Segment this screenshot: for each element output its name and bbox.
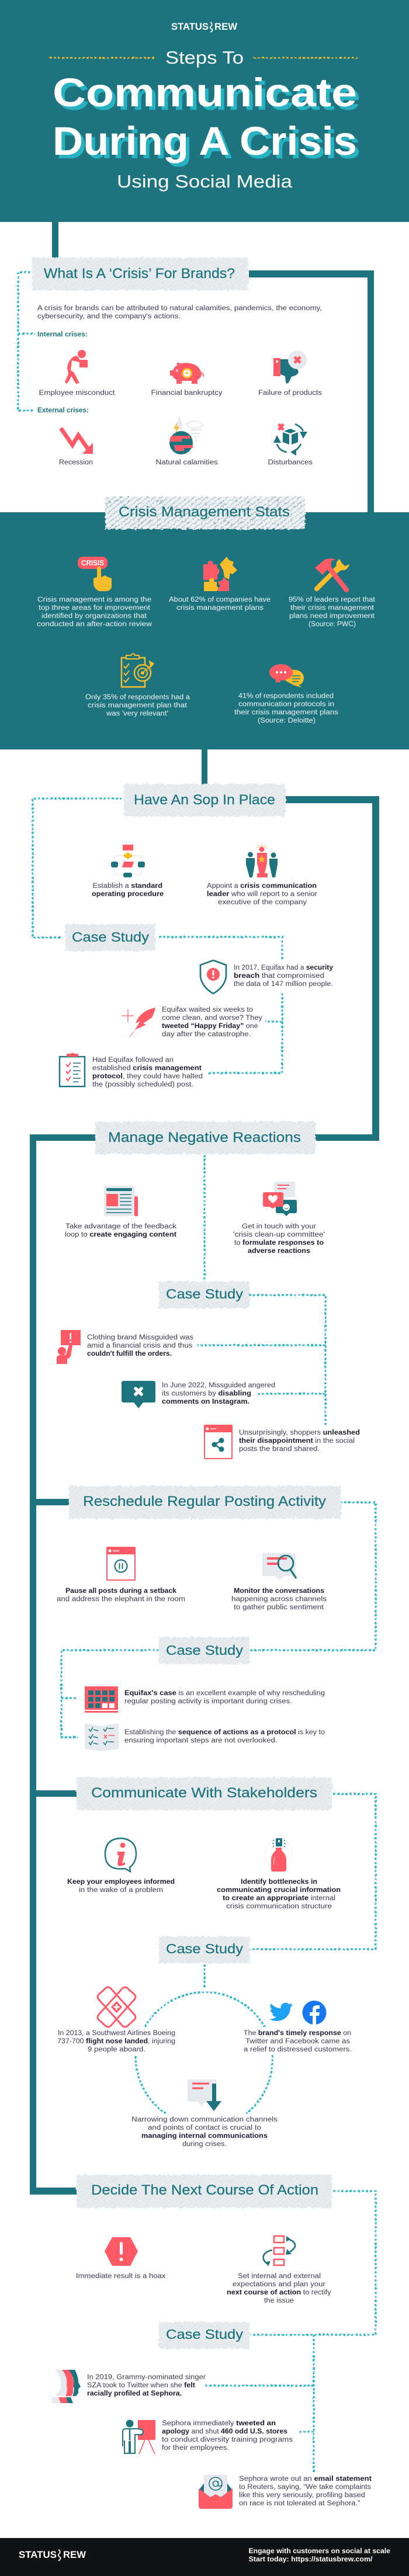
text: identify bottlenecks: Identify bottlenecks in bbox=[241, 1879, 317, 1886]
failure of products label: Failure of products bbox=[258, 390, 322, 397]
text: shoppers disappointment: their disappointment in the social bbox=[239, 1438, 355, 1445]
text: standard operating procedure: Establish a standard bbox=[92, 883, 162, 890]
connector: manage reactions bbox=[203, 1151, 206, 1279]
footer call to action: Engage with customers on social at scale bbox=[249, 2548, 390, 2555]
stat: 41 percent: communication protocols in bbox=[238, 701, 334, 708]
icon: warning hexagon bbox=[105, 2237, 138, 2266]
icon: reactions chat bbox=[263, 1182, 297, 1216]
natural calamities label: Natural calamities bbox=[155, 459, 218, 466]
internal crises label: Internal crises: bbox=[37, 331, 88, 338]
text: brand timely response: Twitter and Facebook came as bbox=[245, 2038, 350, 2045]
text: pause posts: Pause all posts during a setback bbox=[65, 1588, 177, 1595]
icon: quill bbox=[122, 1008, 155, 1039]
stat: 95 percent: (Source: PWC) bbox=[309, 621, 356, 628]
icon: process cycle bbox=[264, 2236, 295, 2266]
icon: newspaper bbox=[104, 1186, 138, 1216]
case study heading: Case Study bbox=[166, 1286, 244, 1301]
stat: top three areas: conducted an after-action review bbox=[37, 621, 152, 628]
text: set expectations: expectations and plan your bbox=[233, 2281, 325, 2288]
text: missguided crisis: amid a financial crisis and thus bbox=[87, 1342, 193, 1349]
financial bankruptcy label: Financial bankruptcy bbox=[151, 390, 223, 397]
text: email statement bbox=[239, 2476, 372, 2507]
text: keep employees informed: in the wake of a problem bbox=[79, 1887, 163, 1894]
panel: what is a crisis bbox=[32, 258, 322, 466]
text: sephora apology: for their employees. bbox=[162, 2445, 229, 2452]
text: brand timely response: The brand's timely response on bbox=[244, 2030, 351, 2037]
text: shoppers disappointment: Unsurprisingly, shoppers unleashed bbox=[239, 1429, 360, 1436]
case study heading bbox=[159, 1637, 249, 1664]
icon: face profiles bbox=[51, 2370, 81, 2403]
connector: sop case study bbox=[159, 937, 282, 1073]
text: equifax breach bbox=[234, 964, 334, 988]
icon: pause window bbox=[107, 1547, 135, 1580]
text: disabling comments bbox=[162, 1382, 275, 1405]
icon: presenter bbox=[123, 2419, 155, 2454]
text: disabling comments: In June 2022, Missguided angered bbox=[162, 1382, 275, 1389]
footer logo: STATUS bbox=[19, 2549, 57, 2560]
icon: disturbances bbox=[273, 422, 307, 456]
text: monitor conversations: to gather public sentiment bbox=[234, 1604, 324, 1611]
panel: header bbox=[53, 21, 357, 192]
text: equifax case: regular posting activity is important during crises. bbox=[124, 1698, 292, 1705]
heading: Crisis Management Stats bbox=[119, 504, 290, 520]
text: clean-up committee: Get in touch with your bbox=[242, 1223, 316, 1230]
text: standard operating procedure bbox=[92, 883, 164, 898]
stat: 62 percent: About 62% of companies have bbox=[169, 596, 271, 603]
text: crisis communication leader: leader who will report to a senior bbox=[207, 891, 317, 898]
stat: 35 percent: was 'very relevant' bbox=[106, 710, 168, 717]
case study heading bbox=[159, 2322, 249, 2349]
intro text: A crisis for brands can be attributed to natural calamities, pandemics, the economy, bbox=[37, 305, 322, 312]
solid flow line bbox=[30, 222, 379, 2195]
text: email statement: to Reuters, saying, “We take complaints bbox=[239, 2484, 371, 2491]
text: crisis communication leader: Appoint a crisis communication bbox=[207, 883, 317, 890]
text: crisis management protocol bbox=[92, 1057, 203, 1088]
intro text: cybersecurity, and the company's actions. bbox=[37, 313, 181, 320]
icon: bandages bbox=[96, 1986, 137, 2028]
text: set expectations: the issue bbox=[264, 2297, 294, 2304]
text: disabling comments: its customers by disabling bbox=[162, 1390, 251, 1397]
text: crisis management protocol: Had Equifax followed an bbox=[92, 1057, 174, 1064]
icon: bottleneck bbox=[265, 1838, 292, 1872]
text: missguided crisis bbox=[87, 1334, 193, 1358]
heading bbox=[124, 784, 286, 817]
recession label: Recession bbox=[59, 459, 93, 466]
text: happy friday bbox=[162, 1006, 262, 1038]
stat: top three areas: Crisis management is among the bbox=[37, 596, 151, 603]
stat: 41 percent: (Source: Deloitte) bbox=[258, 717, 316, 724]
text: set expectations: Set internal and external bbox=[238, 2273, 321, 2280]
text: crisis management protocol: established crisis management bbox=[92, 1065, 202, 1072]
logo: REW bbox=[214, 21, 238, 32]
icon: team leader bbox=[246, 843, 278, 877]
heading: Manage Negative Reactions bbox=[108, 1130, 301, 1145]
icon: chat bubbles bbox=[269, 664, 304, 688]
stat: 95 percent: plans need improvement bbox=[289, 613, 375, 620]
footer call to action bbox=[249, 2548, 390, 2563]
panel: communicate with stakeholders bbox=[57, 1777, 352, 2148]
text: identify bottlenecks: communicating crucial information bbox=[217, 1887, 341, 1894]
text: sza sephora: In 2019, Grammy-nominated singer bbox=[87, 2374, 206, 2381]
heading: Have An Sop In Place bbox=[134, 792, 275, 808]
text: email statement: on race is not tolerated at Sephora.” bbox=[239, 2500, 361, 2507]
icon: financial bankruptcy bbox=[170, 363, 203, 384]
stat: top three areas bbox=[37, 596, 152, 628]
icon: tools bbox=[315, 558, 349, 590]
stat: 95 percent: their crisis management bbox=[290, 605, 375, 612]
text: sephora apology: Sephora immediately tweeted an bbox=[162, 2420, 276, 2427]
icon: calendar bbox=[85, 1686, 118, 1713]
text: happy friday: day after the catastrophe. bbox=[162, 1031, 251, 1038]
case study heading: Case Study bbox=[72, 929, 150, 945]
heading: What Is A ‘Crisis’ For Brands? bbox=[44, 266, 235, 282]
stat: top three areas: identified by organizations that bbox=[41, 613, 147, 620]
connector: decide case study bbox=[204, 2335, 314, 2472]
intro text bbox=[37, 305, 322, 320]
employee misconduct label: Employee misconduct bbox=[39, 390, 115, 397]
icon: employee misconduct bbox=[65, 350, 88, 384]
icon: flowchart bbox=[111, 845, 145, 877]
text: narrowing channels: managing internal communications bbox=[141, 2133, 268, 2140]
icon: clipboard target bbox=[122, 654, 154, 687]
icon: protester bbox=[57, 1330, 81, 1364]
text: pause posts: and address the elephant in the room bbox=[57, 1596, 185, 1603]
text: clean-up committee: to formulate responses to bbox=[234, 1240, 324, 1247]
connector: reschedule bbox=[250, 1502, 376, 1650]
text: brand timely response bbox=[244, 2030, 352, 2053]
stat: top three areas: top three areas for improvement bbox=[39, 605, 151, 612]
icon: share window bbox=[204, 1425, 232, 1459]
icon: checklist bbox=[60, 1053, 85, 1086]
text: feedback loop: Take advantage of the feedback bbox=[65, 1223, 176, 1230]
case study heading bbox=[65, 924, 155, 951]
text: shoppers disappointment bbox=[239, 1429, 360, 1453]
heading: Decide The Next Course Of Action bbox=[91, 2182, 318, 2198]
icon: facebook bbox=[303, 2001, 326, 2025]
text: sza sephora: racially profiled at Sephora. bbox=[87, 2390, 182, 2397]
text: narrowing channels: and points of contact is crucial to bbox=[148, 2124, 261, 2131]
text: narrowing channels bbox=[131, 2116, 278, 2148]
panel: manage negative reactions bbox=[57, 1122, 360, 1459]
text: disabling comments: comments on Instagram. bbox=[162, 1398, 249, 1405]
text: crisis communication leader bbox=[207, 883, 317, 906]
icon: recession arrow bbox=[61, 428, 93, 454]
heading bbox=[95, 1122, 316, 1154]
text: sephora apology bbox=[162, 2420, 293, 2452]
text: feedback loop: loop to create engaging content bbox=[65, 1231, 176, 1238]
connector: manage case study bbox=[197, 1295, 325, 1426]
text: keep employees informed: Keep your employees informed bbox=[67, 1879, 175, 1886]
text: equifax breach: the data of 147 million people. bbox=[234, 981, 333, 988]
heading bbox=[77, 2175, 332, 2208]
icon: twitter bbox=[269, 2003, 293, 2021]
icon: failure of products bbox=[273, 350, 307, 384]
text: pause posts bbox=[57, 1588, 185, 1603]
text: crisis communication leader: executive of the company bbox=[218, 899, 307, 906]
text: equifax breach: breach that compromised bbox=[234, 973, 324, 980]
connector: circular flow bbox=[136, 1992, 272, 2113]
title: steps to: Steps To bbox=[165, 47, 244, 68]
text: clean-up committee bbox=[233, 1223, 325, 1255]
text: monitor conversations: happening across channels bbox=[231, 1596, 327, 1603]
text: happy friday: come clean, and worse? They bbox=[162, 1015, 262, 1022]
stat: 35 percent: crisis management plan that bbox=[88, 702, 188, 709]
text: equifax breach: In 2017, Equifax had a security bbox=[234, 964, 334, 971]
stat: 95 percent: 95% of leaders report that bbox=[289, 596, 376, 603]
text: missguided crisis: Clothing brand Missguided was bbox=[87, 1334, 193, 1341]
case study heading bbox=[159, 1282, 249, 1308]
stat: 41 percent: their crisis management plans bbox=[234, 709, 338, 716]
text: crisis management protocol: the (possibly scheduled) post. bbox=[92, 1081, 193, 1088]
text: identify bottlenecks: to create an appropriate internal bbox=[223, 1895, 335, 1902]
external crises label: External crises: bbox=[37, 407, 89, 414]
panel: decide the next course of action bbox=[51, 2175, 372, 2509]
stats panel background bbox=[0, 512, 409, 749]
icon: natural calamities bbox=[169, 416, 202, 454]
stat: 35 percent: Only 35% of respondents had a bbox=[85, 694, 190, 701]
icon: puzzle bbox=[203, 557, 237, 591]
title: communicate: Communicate bbox=[53, 70, 357, 115]
stat: 41 percent bbox=[234, 693, 338, 724]
text: immediate result: Immediate result is a hoax bbox=[76, 2273, 166, 2280]
logo: STATUS bbox=[171, 21, 209, 32]
footer logo bbox=[19, 2549, 86, 2561]
icon: narrowing arrow bbox=[188, 2079, 221, 2111]
panel: have an sop in place bbox=[60, 784, 334, 1088]
icon: crisis button: CRISIS bbox=[81, 558, 104, 567]
title: using social media: Using Social Media bbox=[117, 171, 293, 192]
footer call to action: Start today: https://statusbrew.com/ bbox=[249, 2556, 373, 2563]
panel: footer bbox=[19, 2548, 390, 2563]
case study heading: Case Study bbox=[166, 1643, 244, 1658]
heading bbox=[69, 1486, 341, 1519]
connector: decide bbox=[250, 2191, 376, 2335]
panel: reschedule regular posting activity bbox=[57, 1486, 341, 1751]
text: missguided crisis: couldn't fulfill the orders. bbox=[87, 1351, 172, 1358]
stat: 95 percent bbox=[289, 596, 376, 628]
text: southwest airlines: In 2013, a Southwest Airlines Boeing bbox=[58, 2030, 175, 2037]
text: crisis management protocol: protocol , they could have halted bbox=[92, 1073, 203, 1080]
text: shoppers disappointment: posts the brand shared. bbox=[239, 1446, 320, 1453]
text: monitor conversations bbox=[231, 1588, 327, 1611]
stat: 62 percent: crisis management plans bbox=[176, 605, 264, 612]
connector: reschedule case study bbox=[61, 1650, 159, 1737]
text: set expectations bbox=[227, 2273, 331, 2304]
text: equifax case: Equifax's case is an excellent example of why rescheduling bbox=[124, 1690, 325, 1697]
text: narrowing channels: during crises. bbox=[182, 2141, 227, 2148]
icon: protocol book bbox=[85, 1723, 119, 1751]
case study heading: Case Study bbox=[166, 1941, 244, 1956]
text: email statement: Sephora wrote out an email statement bbox=[239, 2476, 372, 2483]
case study heading bbox=[159, 1936, 249, 1963]
stat: 41 percent: 41% of respondents included bbox=[238, 693, 334, 700]
stat: 35 percent bbox=[85, 694, 190, 717]
panel: crisis management stats bbox=[37, 497, 376, 724]
footer logo: REW bbox=[63, 2549, 86, 2560]
heading bbox=[105, 497, 305, 529]
text: southwest airlines: 737-700 flight nose landed , injuring bbox=[57, 2038, 175, 2045]
icon: shield bbox=[200, 960, 226, 994]
text: sephora apology: to conduct diversity training programs bbox=[162, 2436, 293, 2443]
text: keep employees informed bbox=[67, 1879, 175, 1894]
icon: email bbox=[199, 2475, 233, 2509]
text: email statement: like this very seriously, profiling based bbox=[239, 2492, 365, 2499]
text: brand timely response: a relief to distressed customers. bbox=[244, 2046, 352, 2053]
case study heading: Case Study bbox=[166, 2327, 244, 2342]
text: equifax case bbox=[124, 1690, 325, 1705]
heading bbox=[77, 1777, 332, 1810]
footer bar bbox=[0, 2538, 409, 2576]
heading: Communicate With Stakeholders bbox=[91, 1785, 317, 1801]
text: sequence of actions: ensuring important steps are not overlooked. bbox=[124, 1737, 277, 1744]
icon: crisis button bbox=[78, 557, 112, 591]
logo bbox=[171, 21, 238, 32]
disturbances label: Disturbances bbox=[268, 459, 313, 466]
icon: info bubble bbox=[105, 1838, 136, 1872]
text: sephora apology: apology and shut 460 odd U.S. stores bbox=[162, 2428, 287, 2435]
text: monitor conversations: Monitor the conversations bbox=[234, 1588, 324, 1595]
heading bbox=[32, 258, 248, 290]
text: happy friday: Equifax waited six weeks to bbox=[162, 1006, 253, 1013]
text: identify bottlenecks bbox=[217, 1879, 341, 1910]
text: clean-up committee: adverse reactions bbox=[248, 1248, 310, 1255]
icon: comment disabled bbox=[122, 1381, 155, 1408]
text: feedback loop bbox=[65, 1223, 176, 1238]
text: sequence of actions: Establishing the sequence of actions as a protocol is key to bbox=[124, 1729, 325, 1736]
connector: stakeholders case study bbox=[203, 1964, 206, 1988]
text: set expectations: next course of action to rectify bbox=[227, 2289, 331, 2296]
text: sequence of actions bbox=[124, 1729, 325, 1744]
header banner bbox=[0, 0, 409, 222]
text: sza sephora bbox=[87, 2374, 206, 2397]
text: sza sephora: SZA took to Twitter when she felt bbox=[87, 2382, 195, 2389]
text: southwest airlines: 9 people aboard. bbox=[88, 2046, 145, 2053]
connector: header ornaments bbox=[50, 57, 358, 58]
text: narrowing channels: Narrowing down communication channels bbox=[131, 2116, 278, 2123]
text: clean-up committee: 'crisis clean-up committee' bbox=[233, 1231, 325, 1238]
text: happy friday: tweeted “Happy Friday” one bbox=[162, 1023, 258, 1030]
icon: magnifier bbox=[262, 1553, 296, 1580]
connector: crisis types bbox=[18, 272, 35, 411]
connector: sop bbox=[33, 799, 122, 938]
connector: stakeholders bbox=[250, 1794, 376, 1949]
heading: Reschedule Regular Posting Activity bbox=[83, 1494, 326, 1509]
stat: 62 percent bbox=[169, 596, 271, 612]
title: during a crisis: During A Crisis bbox=[53, 119, 357, 164]
text: standard operating procedure: operating procedure bbox=[92, 891, 164, 898]
text: southwest airlines bbox=[57, 2030, 175, 2053]
text: identify bottlenecks: crisis communication structure bbox=[226, 1903, 332, 1910]
